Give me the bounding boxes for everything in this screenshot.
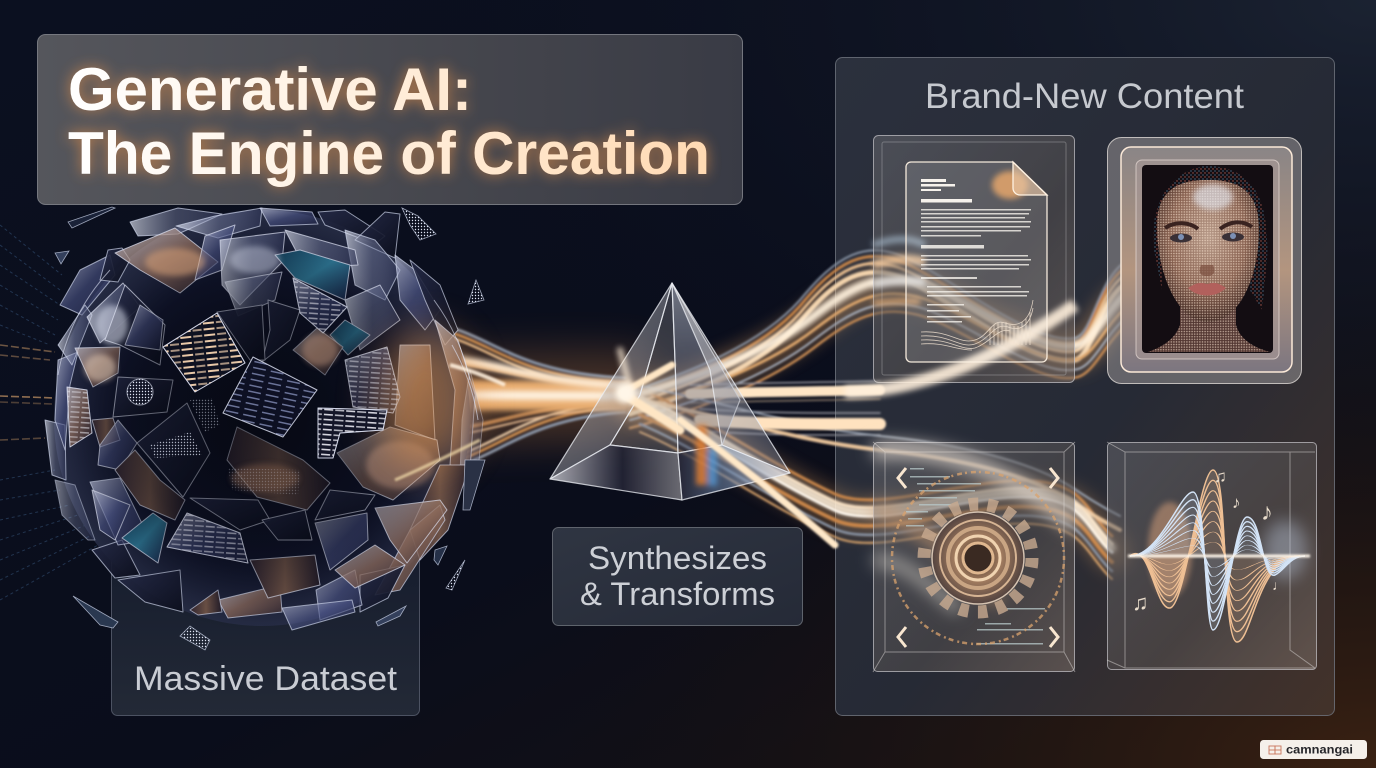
dotted globe and scatter on shards — [127, 379, 300, 495]
highlight streak — [395, 440, 480, 480]
card: portrait — [1108, 138, 1302, 384]
arc lens highlights — [58, 270, 478, 420]
text-covered shards — [67, 278, 400, 563]
document sheet — [906, 162, 1047, 362]
gear — [924, 504, 1032, 612]
panel: title — [38, 34, 742, 204]
rainbow refraction — [696, 425, 717, 486]
face — [1157, 180, 1259, 322]
heading: Brand-New Content: Brand-New Content — [925, 77, 1244, 116]
title glow — [68, 56, 710, 187]
code text lines — [906, 468, 1045, 644]
watermark badge: camnangai — [1286, 742, 1353, 756]
dashed orbit ring — [892, 472, 1064, 644]
label: & Transforms: & Transforms — [580, 576, 775, 612]
title text: Generative AI: — [68, 56, 472, 123]
music notes: ♫ — [1132, 590, 1148, 615]
watermark badge — [1260, 740, 1367, 759]
music notes: ♪ — [1261, 499, 1273, 526]
label: Massive Dataset: Massive Dataset — [134, 660, 398, 698]
card: code and gear — [873, 442, 1075, 672]
music notes — [1132, 467, 1286, 615]
card: text document — [845, 136, 1075, 392]
warm light on right side — [377, 330, 473, 470]
title text — [68, 56, 710, 187]
music notes: ♪ — [1232, 493, 1240, 512]
music notes: ♩ — [1272, 577, 1286, 593]
title text: The Engine of Creation — [68, 120, 710, 187]
prism focal glow — [615, 383, 635, 403]
waveform — [1128, 470, 1310, 642]
incoming data lines at left edge — [0, 225, 98, 600]
icon: book — [1269, 746, 1281, 754]
prism — [550, 283, 835, 545]
output light streams — [630, 250, 1130, 579]
bracket chevrons — [898, 468, 1058, 647]
hair — [1153, 166, 1267, 310]
centre shading — [50, 206, 474, 630]
input light streams into prism — [430, 322, 625, 472]
flying shard fragments — [55, 207, 485, 650]
title glow: Generative AI: — [68, 56, 472, 123]
mini line chart — [921, 300, 1033, 350]
label: Synthesizes: Synthesizes — [588, 540, 767, 576]
brows, eyes, nose, lips — [1165, 222, 1252, 296]
refracted beams — [620, 350, 835, 545]
shard highlights — [84, 246, 434, 492]
panel: massive dataset — [112, 540, 420, 716]
glowing streams through card — [845, 171, 1075, 392]
music notes: ♫ — [1214, 467, 1227, 486]
inner shards — [67, 225, 447, 598]
portrait image — [1142, 165, 1273, 353]
title glow: The Engine of Creation — [68, 120, 710, 187]
neck and shoulders — [1148, 305, 1270, 352]
card: audio waveform — [1107, 442, 1316, 670]
outer ring shards — [45, 208, 483, 630]
prism faces — [550, 283, 790, 500]
dataset sphere of glass shards — [45, 206, 505, 630]
flowing light behind gear — [873, 449, 1075, 610]
panel: synthesizes and transforms — [552, 528, 802, 626]
